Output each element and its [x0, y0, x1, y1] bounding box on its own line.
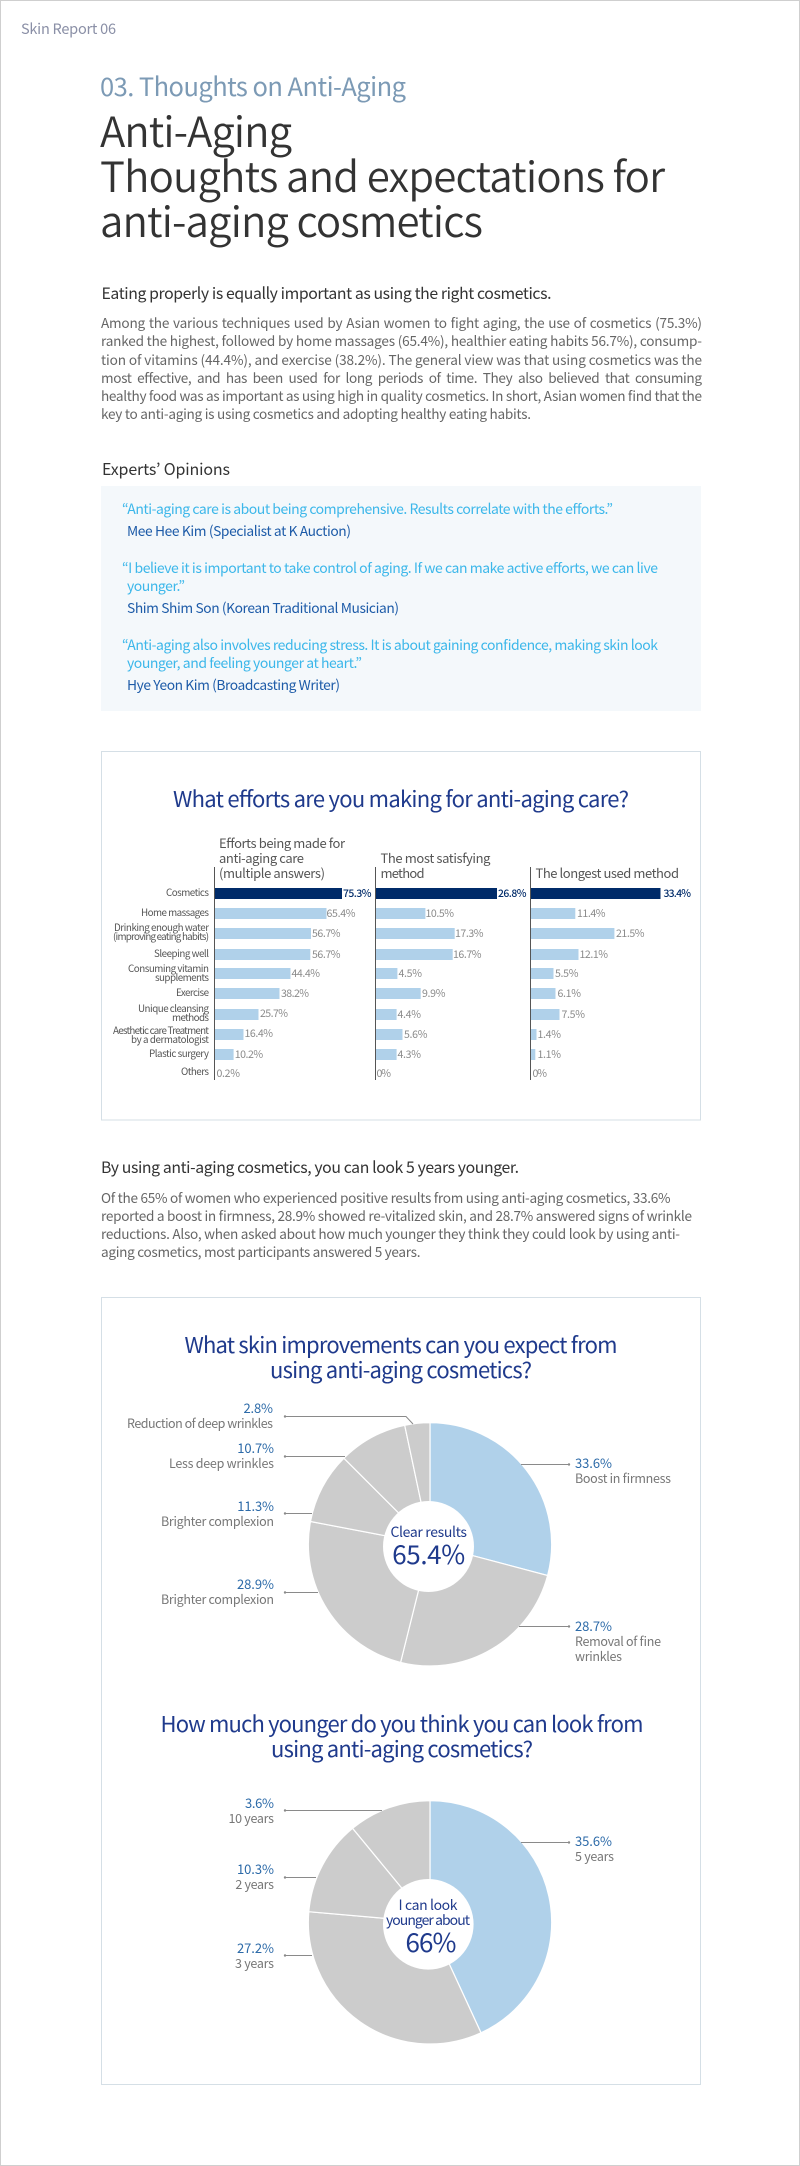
column 3: longest used method: 6.1%	[558, 986, 581, 1001]
donut center: look younger	[386, 1895, 471, 1960]
callout: 35.6%	[521, 1831, 614, 1865]
row labels: Unique cleansing	[138, 1001, 209, 1015]
row labels	[113, 885, 210, 1078]
column 1: efforts being made: 44.4%	[292, 966, 320, 981]
quote 1: “Anti-aging care is about being comprehensive. Results correlate with the efforts.”	[122, 499, 613, 519]
subheading: five years younger: By using anti-aging cosmetics, you can look 5 years younger.	[101, 1155, 519, 1178]
column 3: longest used method: 1.4%	[538, 1027, 561, 1042]
column 1: efforts being made: 10.2%	[235, 1047, 263, 1062]
callout: 27.2%: 3 years	[235, 1953, 274, 1972]
column 3: longest used method: The longest used method	[536, 863, 679, 882]
column 1: efforts being made: 38.2%	[281, 986, 309, 1001]
callout: 28.9%: Brighter complexion	[161, 1589, 274, 1608]
quote 1: Mee Hee Kim (Specialist at K Auction)	[127, 520, 351, 540]
row labels: Others	[181, 1064, 209, 1078]
column 2: most satisfying method: 17.3%	[455, 926, 484, 941]
column 2: most satisfying method: The most satisfying	[380, 848, 491, 867]
row labels: Consuming vitamin	[128, 961, 209, 975]
donut chart: how much younger	[308, 1801, 552, 2044]
chart title: how much younger: How much younger do you think you can look from	[160, 1707, 644, 1739]
callout: 28.7%: wrinkles	[575, 1646, 622, 1665]
column 1: efforts being made: Efforts being made for	[219, 833, 346, 852]
callout: 3.6%: 3.6%	[245, 1793, 274, 1812]
column 1: efforts being made: 56.7%	[312, 926, 341, 941]
title: Anti-Aging	[100, 99, 292, 160]
text block: positive results paragraph: aging cosmetics, most participants answered 5 years.	[101, 1241, 420, 1261]
row labels: Sleeping well	[154, 946, 209, 960]
callout: 2.8%	[127, 1398, 413, 1432]
column 2: most satisfying method: 5.6%	[404, 1027, 428, 1042]
subheading: eating properly: Eating properly is equally important as using the right cosmetics.	[102, 281, 552, 304]
row labels: Cosmetics	[166, 885, 209, 899]
column 3: longest used method: 21.5%	[616, 926, 645, 941]
text block: techniques paragraph: most effective, and has been used for long periods of time. They also believed that consuming	[101, 367, 702, 387]
column 1: efforts being made: anti-aging care	[219, 848, 304, 867]
donut center: look younger: 66%	[406, 1923, 456, 1960]
callout: 10.7%: 10.7%	[237, 1438, 274, 1457]
column 3: longest used method: 12.1%	[580, 947, 608, 962]
callout: 35.6%: 35.6%	[575, 1831, 612, 1850]
callout: 10.3%	[235, 1859, 316, 1893]
quote 3: younger, and feeling younger at heart.”	[127, 653, 362, 673]
row labels: Exercise	[176, 985, 210, 999]
column 3: longest used method: 0%	[532, 1066, 547, 1081]
column 2: most satisfying method: method	[380, 863, 424, 882]
callout: 3.6%	[228, 1793, 382, 1827]
quote 2: “I believe it is important to take control of aging. If we can make active efforts, we can live	[122, 558, 658, 578]
chart title: how much younger: using anti-aging cosmetics?	[271, 1732, 533, 1764]
text block: techniques paragraph: key to anti-aging is using cosmetics and adopting healthy eating habits.	[101, 403, 531, 423]
report label: Skin Report 06	[21, 18, 116, 39]
chart title: skin improvements: using anti-aging cosmetics?	[270, 1353, 532, 1385]
text block: positive results paragraph: reductions. Also, when asked about how much younger they think they could look by using anti-	[101, 1223, 680, 1243]
column 1: efforts being made: 75.3%	[343, 885, 372, 900]
callout: 3.6%: 10 years	[228, 1808, 274, 1827]
text block: techniques paragraph: ranked the highest, followed by home massages (65.4%), healthier eating habits 56.7%), consump-	[101, 330, 702, 350]
column 3: longest used method: 1.1%	[538, 1047, 561, 1062]
column 3: longest used method	[530, 863, 691, 1081]
column 3: longest used method: 7.5%	[562, 1007, 585, 1022]
text block: positive results paragraph	[101, 1187, 692, 1261]
row labels: methods	[172, 1010, 209, 1024]
panel: pie charts	[102, 1298, 700, 2084]
callout: 10.7%: Less deep wrinkles	[169, 1453, 274, 1472]
chart title: What efforts are you making for anti-aging care?	[173, 782, 629, 814]
column 2: most satisfying method: 4.4%	[398, 1007, 421, 1022]
panel: experts opinions	[101, 486, 701, 711]
section heading: 03. Thoughts on Anti-Aging	[100, 67, 407, 104]
donut center: clear results: 65.4%	[392, 1535, 465, 1572]
callout: 28.7%: Removal of fine	[575, 1631, 661, 1650]
callout: 28.7%: 28.7%	[575, 1616, 612, 1635]
quote 2: Shim Shim Son (Korean Traditional Musician)	[127, 597, 399, 617]
column 2: most satisfying method: 4.3%	[398, 1047, 421, 1062]
title	[100, 99, 666, 250]
donut center: clear results: Clear results	[390, 1522, 467, 1542]
text block: techniques paragraph	[101, 312, 702, 423]
callout: 10.7%	[169, 1438, 345, 1472]
title: anti-aging cosmetics	[100, 189, 483, 250]
callout: 10.3%: 10.3%	[237, 1859, 274, 1878]
column 2: most satisfying method: 9.9%	[422, 986, 446, 1001]
callout: 27.2%	[235, 1938, 312, 1972]
column 2: most satisfying method: 4.5%	[398, 966, 422, 981]
quote 2: younger.”	[127, 576, 185, 596]
chart title: skin improvements: What skin improvements can you expect from	[184, 1328, 618, 1360]
callout: 33.6%	[521, 1453, 671, 1487]
row labels: Plastic surgery	[149, 1046, 209, 1060]
column 3: longest used method: 5.5%	[555, 966, 579, 981]
callout: 35.6%: 5 years	[575, 1846, 614, 1865]
callout: 2.8%: Reduction of deep wrinkles	[127, 1413, 273, 1432]
callout: 28.9%	[161, 1574, 318, 1608]
row labels: by a dermatologist	[131, 1032, 209, 1046]
column 1: efforts being made: (multiple answers)	[219, 863, 325, 882]
title: Thoughts and expectations for	[100, 144, 666, 205]
quote 3	[122, 635, 658, 694]
donut chart: skin improvements	[308, 1423, 552, 1666]
quote 1	[122, 499, 613, 540]
callout: 10.3%: 2 years	[235, 1874, 274, 1893]
row labels: Aesthetic care Treatment	[113, 1023, 209, 1037]
column 1: efforts being made: 16.4%	[244, 1026, 273, 1041]
callout: 28.9%: 28.9%	[237, 1574, 274, 1593]
column 1: efforts being made: 0.2%	[216, 1066, 240, 1081]
callout: 28.7%	[519, 1616, 661, 1665]
column 1: efforts being made	[214, 833, 372, 1081]
row labels: Home massages	[141, 905, 209, 919]
text block: techniques paragraph: tion of vitamins (44.4%), and exercise (38.2%). The general view was that using cosmetics was the	[101, 349, 702, 369]
chart title: how much younger	[160, 1707, 644, 1764]
column 3: longest used method: 11.4%	[577, 906, 606, 921]
row labels: (improving eating habits)	[113, 929, 209, 943]
row labels: Drinking enough water	[114, 920, 209, 934]
column 2: most satisfying method: 16.7%	[453, 947, 482, 962]
column 2: most satisfying method: 26.8%	[498, 885, 527, 900]
column 1: efforts being made: 65.4%	[326, 906, 356, 921]
callout: 2.8%: 2.8%	[244, 1398, 273, 1417]
column 2: most satisfying method: 0%	[376, 1066, 391, 1081]
callout: 27.2%: 27.2%	[237, 1938, 274, 1957]
panel: efforts bar chart	[102, 752, 700, 1120]
quote 2	[122, 558, 658, 617]
text block: positive results paragraph: reported a boost in firmness, 28.9% showed re-vitalized skin, and 28.7% answered signs of wrinkle	[101, 1205, 692, 1225]
text block: positive results paragraph: Of the 65% of women who experienced positive results from using anti-aging cosmetics, 33.6%	[101, 1187, 670, 1207]
quote 3: “Anti-aging also involves reducing stress. It is about gaining confidence, making skin look	[122, 635, 658, 655]
column 1: efforts being made: 56.7%	[312, 947, 341, 962]
column 3: longest used method: 33.4%	[664, 885, 691, 900]
text block: techniques paragraph: Among the various techniques used by Asian women to fight aging, the use of cosmetics (75.3%)	[101, 312, 702, 332]
callout: 33.6%: 33.6%	[575, 1453, 612, 1472]
callout: 11.3%	[161, 1496, 312, 1530]
quote 3: Hye Yeon Kim (Broadcasting Writer)	[127, 674, 340, 694]
text block: techniques paragraph: healthy food was as important as using high in quality cosmetics. In short, Asian women find that the	[101, 385, 702, 405]
donut center: look younger: I can look	[398, 1895, 458, 1915]
chart title: skin improvements	[184, 1328, 618, 1385]
callout: 11.3%: 11.3%	[237, 1496, 274, 1515]
row labels: supplements	[155, 970, 209, 984]
column 2: most satisfying method	[376, 848, 527, 1081]
donut center: look younger: younger about	[386, 1910, 471, 1930]
column 2: most satisfying method: 10.5%	[426, 906, 454, 921]
callout: 33.6%: Boost in firmness	[575, 1468, 671, 1487]
callout: 11.3%: Brighter complexion	[161, 1511, 274, 1530]
column 1: efforts being made: 25.7%	[260, 1006, 288, 1021]
heading: experts opinions: Experts’ Opinions	[102, 456, 230, 480]
